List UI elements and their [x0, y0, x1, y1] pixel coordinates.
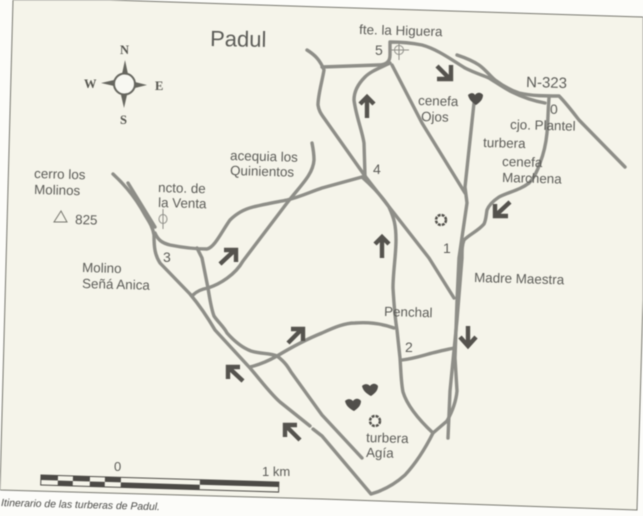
- icon: peat flower upper: [436, 215, 446, 225]
- icon: heart marsh lower: [345, 399, 361, 411]
- icon: peat flower lower: [370, 416, 380, 426]
- title: Padul: Padul: [210, 26, 267, 52]
- scale label 1 km: 1 km: [262, 464, 290, 479]
- arrow: south: [460, 326, 476, 346]
- place labels: Quinientos: [230, 163, 295, 180]
- place labels: 2: [405, 339, 413, 355]
- icon: heart marsh Ojos: [468, 93, 483, 105]
- arrow: southwest: [495, 202, 510, 216]
- place labels: acequia los: [230, 148, 298, 165]
- place labels: 825: [75, 212, 98, 228]
- compass rose: E: [155, 79, 163, 93]
- place labels: turbera: [366, 430, 409, 446]
- arrow: north middle: [375, 237, 389, 258]
- arrow: southeast: [437, 65, 451, 79]
- place labels: cjo. Plantel: [510, 117, 576, 134]
- arrow: northeast upper: [220, 250, 236, 264]
- place labels: [34, 22, 576, 461]
- icon: spring symbol nacimiento de la Venta: [159, 209, 167, 229]
- place labels: 0: [550, 101, 558, 117]
- place labels: 4: [373, 161, 381, 177]
- place labels: 3: [163, 249, 171, 265]
- place labels: la Venta: [158, 195, 207, 211]
- compass rose: [84, 43, 163, 127]
- place labels: 5: [375, 42, 383, 58]
- icon: spring symbol fte. la Higuera: [389, 42, 409, 60]
- place labels: N-323: [526, 74, 567, 92]
- place labels: ncto. de: [158, 180, 206, 196]
- place labels: Penchal: [384, 304, 433, 320]
- place labels: Molinos: [34, 182, 81, 198]
- place labels: Madre Maestra: [474, 270, 565, 287]
- compass rose: W: [84, 77, 97, 91]
- icon: triangle summit: [54, 211, 67, 222]
- place labels: fte. la Higuera: [359, 22, 443, 39]
- scale label 0: 0: [114, 459, 121, 474]
- place labels: cenefa: [502, 154, 543, 170]
- arrow: northeast lower: [288, 329, 303, 343]
- arrow: northwest left: [228, 367, 243, 381]
- place labels: Molino: [82, 260, 122, 276]
- place labels: cerro los: [34, 166, 86, 182]
- place labels: Marchena: [502, 170, 562, 187]
- arrow: north upper: [360, 97, 374, 118]
- place labels: turbera: [483, 135, 526, 151]
- place labels: cenefa: [418, 93, 459, 109]
- place labels: Señá Anica: [82, 276, 151, 293]
- place labels: Ojos: [421, 109, 449, 125]
- caption: Itinerario de las turberas de Padul.: [1, 498, 160, 513]
- compass rose: N: [120, 43, 129, 57]
- place labels: 1: [443, 240, 451, 256]
- road network: [113, 42, 625, 494]
- icon: heart marsh upper: [362, 384, 378, 396]
- place labels: Agía: [366, 445, 394, 461]
- scale bar: [41, 475, 279, 492]
- compass rose: S: [120, 113, 127, 127]
- arrow: northwest lower: [285, 425, 300, 440]
